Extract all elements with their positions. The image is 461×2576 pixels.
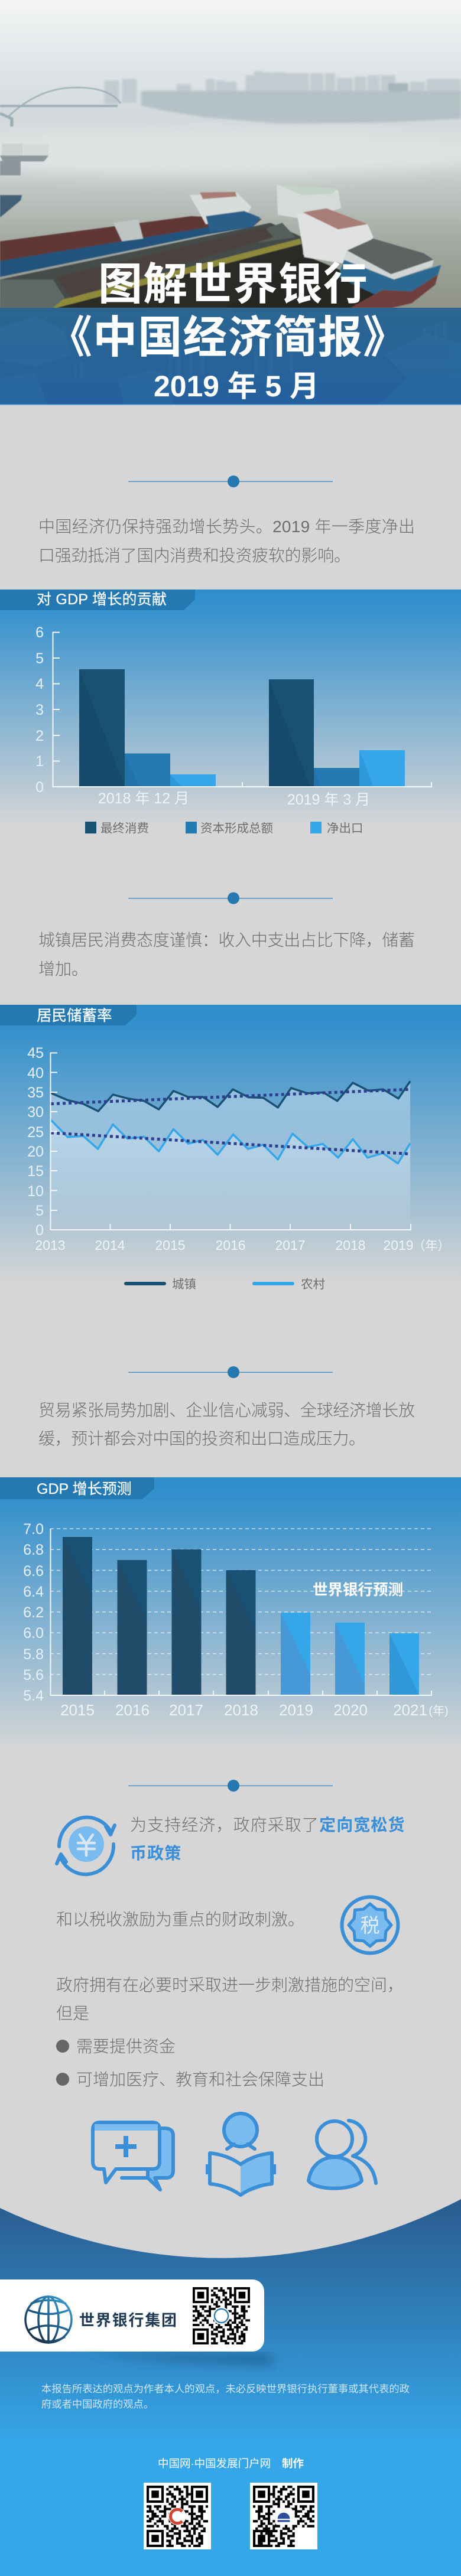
text block 1: 中国经济仍保持强劲增长势头。2019 年一季度净出 <box>38 517 415 536</box>
bar chart: 2019 <box>279 1701 313 1719</box>
line chart: 30 <box>27 1104 44 1121</box>
barge 2 steel load <box>0 223 303 308</box>
legend: GDP contribution: 资本形成总额 <box>200 822 273 835</box>
panel: GDP growth forecast <box>0 1477 461 1751</box>
text block 3 <box>38 1401 415 1448</box>
text: room for stimulus <box>56 1976 404 2023</box>
panel: household savings rate <box>0 1005 461 1285</box>
disclaimer <box>41 2383 410 2410</box>
icon: World Bank globe <box>25 2297 72 2343</box>
footer: blue background with curve <box>0 2199 461 2576</box>
bar chart: 2016 <box>115 1701 150 1719</box>
bar chart: (年) <box>428 1704 449 1718</box>
text: monetary policy: 为支持经济，政府采取了定向宽松货 <box>130 1816 405 1834</box>
bar chart: 6.0 <box>23 1625 44 1642</box>
tab heading: GDP 增长预测 <box>37 1481 132 1497</box>
bar chart: 6.4 <box>23 1584 44 1600</box>
line chart: 2019 <box>383 1237 414 1253</box>
production credit: 中国网·中国发展门户网 <box>158 2457 271 2470</box>
line chart: 2018 <box>335 1237 366 1253</box>
bullet list <box>56 2037 324 2089</box>
date: 2019 年 5 月 <box>154 370 319 403</box>
line chart: 25 <box>27 1124 44 1141</box>
disclaimer: 府或者中国政府的观点。 <box>41 2398 154 2410</box>
disclaimer: 本报告所表达的观点为作者本人的观点，未必反映世界银行执行董事或其代表的政 <box>41 2383 410 2395</box>
tab heading: 居民储蓄率 <box>37 1008 112 1024</box>
line chart: 2013 <box>35 1237 66 1253</box>
bar chart: 2018 <box>224 1701 258 1719</box>
icon: yuan circulation <box>57 1818 115 1874</box>
ship 1 <box>190 193 251 224</box>
bar chart: 2017 <box>169 1701 203 1719</box>
QR code: china.org.cn <box>144 2483 211 2549</box>
line chart: 45 <box>27 1045 44 1061</box>
bar chart: 5 <box>35 650 44 667</box>
bar chart: 7.0 <box>23 1521 44 1538</box>
bar chart: 2018 年 12 月 <box>98 790 189 807</box>
divider 3 <box>128 1366 333 1378</box>
text: monetary policy <box>130 1816 405 1862</box>
text block 2 <box>38 931 415 978</box>
report title: 《中国经济简报》 <box>48 312 407 362</box>
line chart: 2016 <box>215 1237 246 1253</box>
bar chart <box>23 1521 449 1719</box>
bar chart: 6.6 <box>23 1563 44 1580</box>
line chart: 2014 <box>95 1237 125 1253</box>
text block 3: 贸易紧张局势加剧、企业信心减弱、全球经济增长放 <box>38 1401 415 1419</box>
text block 2: 增加。 <box>38 960 88 978</box>
text: fiscal stimulus: 和以税收激励为重点的财政刺激。 <box>56 1910 304 1929</box>
bullet list: 需要提供资金 <box>76 2037 176 2056</box>
bar chart: 1 <box>35 753 44 770</box>
text block 1: 口强劲抵消了国内消费和投资疲软的影响。 <box>38 546 350 565</box>
divider 1 <box>128 476 333 487</box>
main title: 图解世界银行 <box>98 259 368 309</box>
line chart: 0 <box>35 1222 44 1239</box>
legend: savings rate: 农村 <box>301 1278 325 1291</box>
text block 3: 缓，预计都会对中国的投资和出口造成压力。 <box>38 1429 365 1448</box>
line chart: 40 <box>27 1065 44 1082</box>
dark barge <box>226 255 388 308</box>
bar chart: 6.2 <box>23 1604 44 1621</box>
text: room for stimulus: 政府拥有在必要时采取进一步刺激措施的空间， <box>56 1976 404 1994</box>
divider 2 <box>128 892 333 904</box>
icon: person reading a book <box>206 2113 276 2195</box>
main title <box>48 259 407 362</box>
icon: people <box>309 2121 376 2189</box>
bar chart: 2019 年 3 月 <box>287 792 370 808</box>
small boats at left <box>0 144 48 217</box>
QR code: World Bank <box>193 2287 250 2344</box>
legend: savings rate: 城镇 <box>172 1278 196 1291</box>
bar chart: 4 <box>35 676 44 692</box>
tab heading <box>0 1005 137 1025</box>
line chart: 35 <box>27 1085 44 1101</box>
line chart: 2017 <box>275 1237 306 1253</box>
line chart: 15 <box>27 1163 44 1180</box>
bar chart: 5.8 <box>23 1646 44 1663</box>
ship 2 <box>277 184 341 219</box>
divider 4 <box>128 1780 333 1792</box>
panel: contribution to GDP growth <box>0 590 461 827</box>
bar chart: 5.6 <box>23 1667 44 1683</box>
barge 1 <box>0 216 262 261</box>
text: room for stimulus: 但是 <box>56 2004 89 2023</box>
bar chart: 2020 <box>333 1701 368 1719</box>
bridge <box>0 87 121 126</box>
line chart <box>27 1045 450 1253</box>
tab heading <box>0 590 195 610</box>
icon: healthcare chat bubbles <box>93 2122 173 2190</box>
line chart: 20 <box>27 1144 44 1160</box>
bar chart: 0 <box>35 779 44 796</box>
title banner <box>0 308 461 405</box>
tab heading: 对 GDP 增长的贡献 <box>37 591 167 608</box>
bar chart: 6.8 <box>23 1542 44 1558</box>
World Bank Group name: 世界银行集团 <box>79 2311 177 2329</box>
text block 2: 城镇居民消费态度谨慎：收入中支出占比下降，储蓄 <box>38 931 415 949</box>
ship 3 <box>297 214 374 263</box>
QR code: china.com.cn development gateway <box>250 2483 317 2549</box>
text block 1 <box>38 517 415 565</box>
line chart: 10 <box>27 1183 44 1200</box>
tab heading <box>0 1477 154 1499</box>
bar chart: 3 <box>35 702 44 718</box>
icon: tax badge <box>342 1897 398 1953</box>
bullet list: 可增加医疗、教育和社会保障支出 <box>76 2070 324 2089</box>
bar chart: 2021 <box>393 1701 427 1719</box>
line chart: （年） <box>413 1239 450 1253</box>
bar chart: 2 <box>35 728 44 744</box>
bar chart: 2015 <box>60 1701 95 1719</box>
legend: GDP contribution: 最终消费 <box>100 822 149 835</box>
bar chart: 6 <box>35 624 44 641</box>
text: monetary policy: 币政策 <box>130 1844 181 1862</box>
legend: GDP contribution <box>85 822 363 835</box>
logo card <box>0 2279 275 2366</box>
icon: tax badge: 税 <box>361 1914 379 1936</box>
forecast label: 世界银行预测 <box>313 1582 403 1598</box>
bar chart <box>35 624 431 808</box>
header photo: barges on a foggy river <box>0 0 461 308</box>
production credit: 制作 <box>282 2457 304 2470</box>
line chart: 2015 <box>155 1237 186 1253</box>
legend: savings rate <box>126 1278 325 1291</box>
line chart: 5 <box>35 1203 44 1219</box>
legend: GDP contribution: 净出口 <box>327 822 363 835</box>
bar chart: 5.4 <box>23 1688 44 1704</box>
